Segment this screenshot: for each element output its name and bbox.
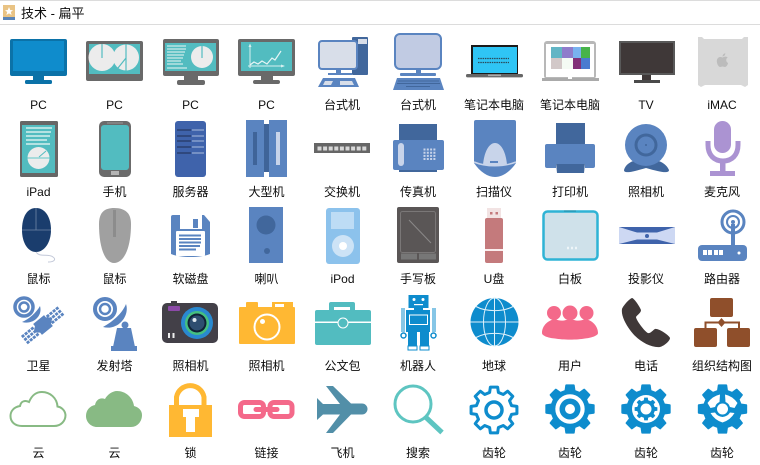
icon: globe [470, 298, 518, 346]
icon: USB drive [485, 208, 503, 263]
label: 锁 [184, 445, 197, 460]
icon: transmission tower [95, 299, 137, 351]
icon: network switch [314, 143, 370, 153]
label: 鼠标 [102, 272, 127, 286]
label: 齿轮 [482, 446, 506, 460]
label: PC [182, 98, 199, 112]
label: 地球 [482, 359, 506, 373]
label: 照相机 [628, 185, 664, 199]
label: 组织结构图 [692, 358, 752, 373]
icon: TV [619, 41, 675, 83]
label: iMAC [707, 98, 737, 112]
label: 麦克风 [704, 185, 740, 199]
label: 白板 [558, 271, 582, 286]
icon: PC with line chart [238, 39, 295, 84]
label: 软磁盘 [172, 271, 209, 286]
icon: PC with two pies [86, 41, 143, 81]
icon: chain link [240, 402, 292, 416]
label: 机器人 [400, 359, 436, 373]
label: 飞机 [330, 446, 355, 460]
title: 技术 - 扁平 [21, 6, 85, 21]
icon: iPod [326, 208, 360, 264]
icon: laptop blue screen [466, 45, 523, 77]
label: PC [30, 98, 47, 112]
icon: robot [401, 295, 436, 350]
label: 服务器 [172, 184, 209, 199]
label: 传真机 [400, 184, 436, 199]
icon: fax machine [393, 124, 444, 172]
icon: floppy disk [171, 215, 210, 257]
icon: speaker [249, 207, 283, 263]
icon: computer mouse dark [22, 208, 55, 262]
icon: mobile phone [99, 121, 131, 177]
label: PC [106, 98, 123, 112]
icon: PC blue monitor [10, 39, 67, 84]
label: iPad [26, 185, 51, 199]
label: 交换机 [324, 184, 360, 199]
label: 齿轮 [634, 446, 658, 460]
icon: projector [619, 227, 675, 244]
icon: title star badge [3, 5, 15, 20]
label: 云 [108, 446, 121, 460]
icon: cloud filled [86, 391, 142, 427]
label: 照相机 [172, 359, 209, 373]
label: 投影仪 [628, 271, 664, 286]
icon: cloud outline [10, 392, 66, 426]
icon: briefcase [315, 302, 371, 345]
label: 云 [32, 446, 45, 460]
icon: microphone [708, 121, 738, 176]
icon: camera dark [162, 301, 218, 343]
label: iPod [330, 272, 355, 286]
label: 笔记本电脑 [464, 97, 524, 112]
icon: desktop with tower [318, 37, 368, 87]
icon: iPad [20, 121, 58, 177]
label: 照相机 [248, 359, 285, 373]
icon: organisation chart [694, 298, 750, 347]
icon: computer mouse grey [99, 208, 131, 263]
icon: magnifying glass [395, 386, 442, 432]
label: 大型机 [248, 185, 285, 199]
icon: graphics tablet [397, 207, 439, 263]
icon: telephone handset [622, 298, 670, 347]
label: 搜索 [406, 445, 430, 460]
icon: PC with list and pie [163, 39, 219, 85]
icon: padlock [169, 386, 212, 437]
label: 齿轮 [710, 446, 734, 460]
label: 齿轮 [558, 446, 582, 460]
icon: webcam [624, 124, 669, 172]
icon: scanner [474, 120, 516, 177]
label: 手写板 [400, 272, 436, 286]
icon: server [175, 121, 206, 177]
label: 链接 [254, 445, 279, 460]
label: 鼠标 [26, 272, 51, 286]
label: 打印机 [552, 185, 588, 199]
icon: camera yellow [239, 302, 295, 344]
icon: airplane [317, 386, 368, 433]
label: 手机 [102, 185, 127, 199]
label: 发射塔 [96, 358, 133, 373]
icon: satellite [15, 298, 66, 346]
label: PC [258, 98, 275, 112]
label: 喇叭 [254, 271, 279, 286]
icon: desktop with large screen [393, 34, 444, 90]
icon: printer [545, 123, 595, 173]
label: 电话 [634, 359, 658, 373]
label: 台式机 [324, 97, 360, 112]
label: TV [638, 98, 654, 112]
label: U盘 [484, 271, 504, 286]
label: 卫星 [26, 359, 51, 373]
icon: router [698, 211, 747, 261]
label: 路由器 [704, 271, 740, 286]
icon: iMAC tower [698, 37, 748, 87]
icon: laptop colour blocks [542, 41, 599, 81]
icon: gear with ring [546, 385, 594, 433]
icon: gear outline [471, 387, 517, 433]
icon: users [542, 306, 598, 340]
icon: gear with inner cog [622, 385, 670, 433]
icon: whiteboard [544, 210, 598, 260]
icon: mainframe [246, 120, 287, 177]
icon: gear with blades [699, 385, 746, 433]
label: 台式机 [400, 97, 436, 112]
label: 公文包 [324, 358, 361, 373]
label: 扫描仪 [476, 185, 512, 199]
label: 用户 [558, 358, 582, 373]
label: 笔记本电脑 [540, 97, 600, 112]
